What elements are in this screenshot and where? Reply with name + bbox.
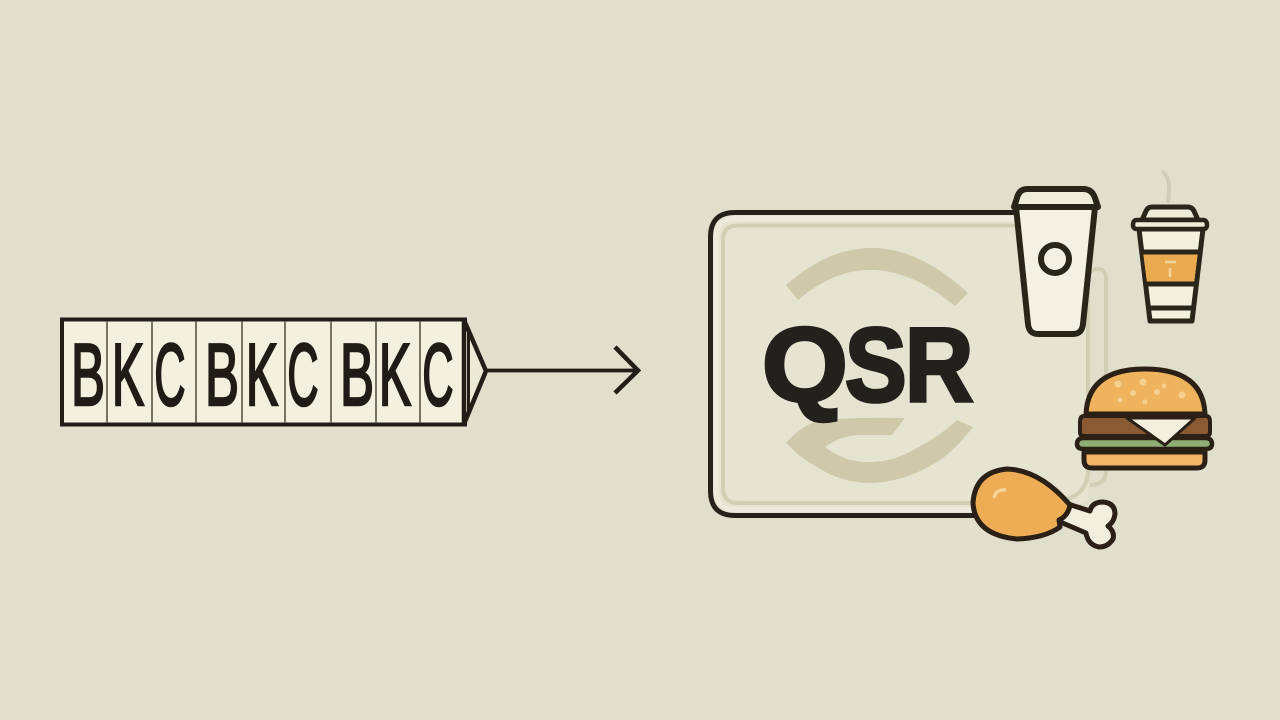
icon: steam	[1162, 171, 1169, 203]
ticker letters: C	[422, 325, 454, 424]
lower circular arrow arc	[786, 418, 973, 483]
arrow to QSR tray	[487, 347, 638, 393]
tray outline	[710, 212, 1015, 516]
QSR label: S	[845, 305, 907, 423]
drumstick meat	[973, 469, 1070, 539]
drumstick highlight	[994, 490, 1006, 498]
burger patty	[1080, 416, 1210, 436]
ticker letters: C	[154, 325, 186, 424]
drumstick bone	[1058, 502, 1115, 547]
ticker letters: B	[205, 327, 239, 425]
icon: burger	[1077, 369, 1212, 468]
tray highlight band	[716, 218, 1015, 510]
QSR label	[762, 305, 973, 424]
ticker letters	[71, 325, 454, 425]
ticker letters: K	[379, 327, 411, 425]
tray	[710, 212, 1106, 516]
ticker letters: B	[71, 327, 105, 425]
tray inner fill	[710, 212, 1088, 516]
icon: chicken drumstick	[973, 469, 1115, 547]
QSR label: Q	[762, 306, 848, 423]
upper circular arrow arc	[786, 248, 968, 306]
ticker cell dividers	[107, 321, 420, 423]
ticker tape: BKC BKC BKC	[62, 320, 486, 425]
burger sesame seeds	[1114, 378, 1186, 404]
ticker letters: K	[246, 327, 278, 425]
icon: small coffee cup	[1133, 207, 1207, 321]
ticker letters: C	[287, 325, 319, 424]
icon: large cup	[1014, 189, 1098, 334]
ticker pointed end	[464, 320, 486, 424]
QSR label: R	[905, 307, 973, 424]
burger top bun	[1086, 369, 1205, 414]
burger lettuce	[1077, 438, 1212, 449]
burger bottom bun	[1084, 452, 1205, 468]
ticker letters: K	[112, 327, 144, 425]
ticker letters: B	[340, 327, 374, 425]
tray raised inner edge	[723, 226, 1106, 503]
burger cheese	[1127, 418, 1195, 445]
